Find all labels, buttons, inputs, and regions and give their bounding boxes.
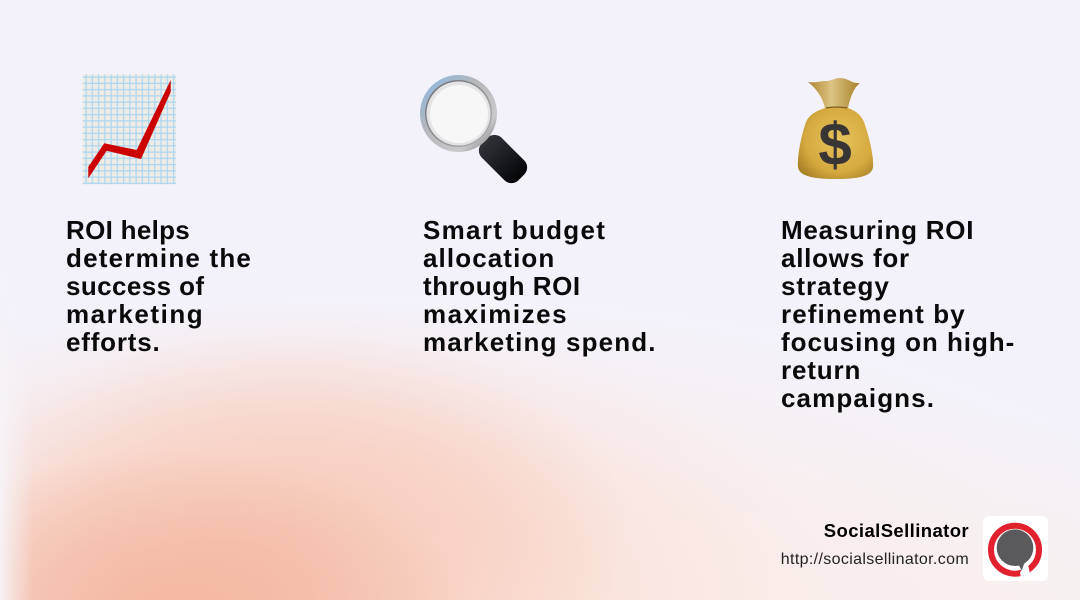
text block: column 2 [423,215,657,357]
text block: column 1: ROI helps [66,215,190,245]
text block: column 2: maximizes [423,299,568,329]
red line [88,80,171,178]
text block: column 3 [781,215,1015,413]
icon: chart increasing [82,74,176,184]
neck tie [826,107,847,108]
bag neck [808,78,860,108]
text block: column 1 [66,215,252,357]
logo [983,516,1048,581]
brand url: http://socialsellinator.com [781,551,969,568]
text block: column 3: focusing on high- [781,327,1015,357]
icon: magnifying glass [420,75,528,184]
text block: column 3: allows for [781,243,910,273]
speech bubble [997,529,1033,571]
text block: column 3: campaigns. [781,383,935,413]
text block: column 1: determine the [66,243,252,273]
text block: column 1: marketing [66,299,204,329]
text block: column 2: through ROI [423,271,581,301]
text block: column 3: refinement by [781,299,966,329]
text block: column 2: Smart budget [423,215,606,245]
lens glass [426,82,490,146]
text block: column 1: success of [66,271,204,301]
lens rim [420,75,497,152]
text block: column 1: efforts. [66,327,161,357]
text block: column 3: return [781,355,861,385]
handle [475,131,531,187]
icon: money bag [798,78,874,179]
bag body [798,107,873,179]
text block: column 3: Measuring ROI [781,215,974,245]
text block: column 2: marketing spend. [423,327,657,357]
brand name: SocialSellinator [824,520,969,541]
dollar sign: $ [818,111,852,178]
text block: column 3: strategy [781,271,890,301]
red ring [991,526,1039,574]
text block: column 2: allocation [423,243,555,273]
